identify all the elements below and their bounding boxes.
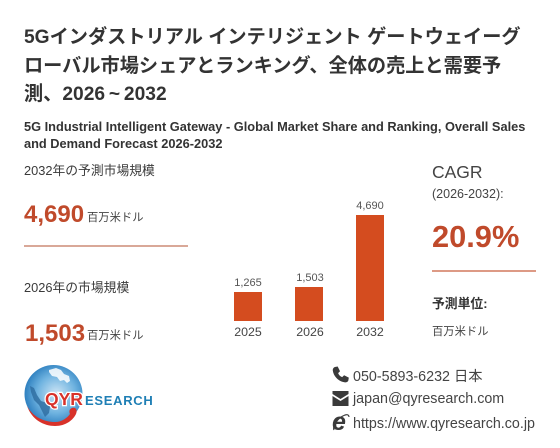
bar: 2025: 2025	[234, 325, 262, 339]
CAGR value: 20.9%	[432, 219, 519, 254]
unit: million USD: 百万米ドル	[87, 212, 144, 224]
subtitle: 5G Industrial Intelligent Gateway - Global Market Share and Ranking, Overall Sales	[24, 119, 525, 134]
wordmark: ESEARCH	[85, 393, 153, 408]
website URL: https://www.qyresearch.co.jp	[353, 416, 535, 432]
bar: 2025: 1,265	[234, 277, 262, 289]
bar: 2026	[295, 272, 324, 339]
wordmark	[45, 389, 153, 409]
bar: 2032: 4,690	[356, 200, 384, 212]
title: 5Gインダストリアル インテリジェント ゲートウェイーグ	[24, 27, 521, 48]
bar: 2032: 2032	[356, 325, 384, 339]
subtitle: and Demand Forecast 2026-2032	[24, 136, 222, 151]
title: 測、2026 ~ 2032	[24, 84, 167, 105]
title: ローバル市場シェアとランキング、全体の売上と需要予	[24, 56, 501, 76]
contact: website	[332, 414, 535, 432]
unit: million USD: 百万米ドル	[87, 330, 144, 342]
globe	[24, 365, 82, 423]
forecast unit value: 百万米ドル	[432, 326, 488, 338]
icon: phone	[332, 366, 349, 382]
wordmark: QYR	[45, 389, 83, 409]
panel: 2026 market size	[24, 280, 144, 347]
bar: 2026: 1,503	[296, 272, 324, 284]
label: 2032 forecast: 2032年の予測市場規模	[24, 163, 155, 178]
value: 4,690: 4,690	[24, 201, 84, 228]
logo: QYResearch	[24, 365, 153, 426]
CAGR label: CAGR	[432, 162, 483, 182]
bar chart	[234, 200, 384, 339]
bar: 2032	[356, 200, 384, 339]
phone number: 050-5893-6232 日本	[353, 369, 483, 385]
email address: japan@qyresearch.com	[353, 391, 504, 407]
subtitle	[24, 119, 525, 151]
icon: envelope	[332, 391, 348, 406]
panel: 2032 market size	[24, 163, 188, 247]
divider	[24, 245, 188, 247]
value: 1,503: 1,503	[25, 320, 85, 347]
forecast unit heading: 予測単位:	[432, 296, 487, 311]
divider	[432, 270, 536, 272]
title	[24, 26, 521, 105]
bar: 2025	[234, 277, 262, 339]
CAGR period: (2026-2032):	[432, 187, 504, 201]
contact: email	[332, 391, 504, 407]
label: 2026 size: 2026年の市場規模	[24, 280, 129, 295]
swoosh	[27, 406, 77, 426]
bar: 2026: 2026	[296, 325, 324, 339]
contact: phone	[332, 366, 483, 385]
panel: CAGR	[432, 162, 536, 338]
